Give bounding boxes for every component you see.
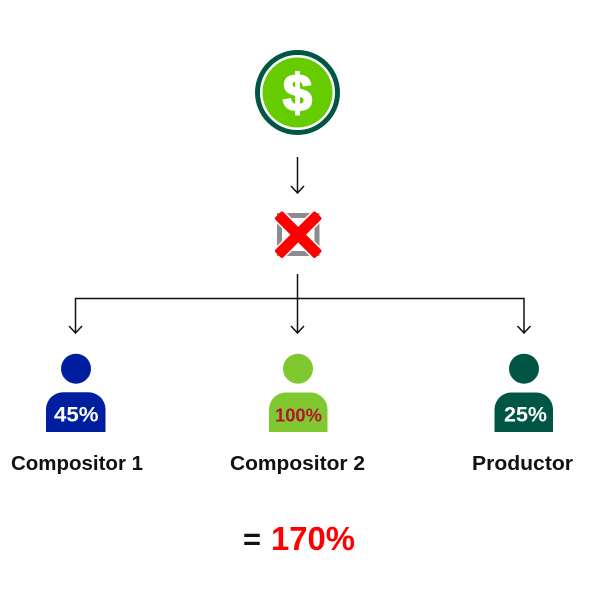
person: Productor — [494, 354, 553, 432]
share: 45%: 45% — [54, 404, 99, 426]
label: Compositor 2: Compositor 2 — [230, 453, 365, 475]
total: equals sign: = — [243, 523, 261, 556]
icon: crossed-out square — [258, 194, 339, 275]
person: Compositor 1 — [46, 354, 106, 432]
connector: branching arrows to three people — [69, 274, 530, 333]
share: 25%: 25% — [504, 404, 547, 426]
icon: dollar coin — [258, 52, 338, 132]
label: Compositor 1: Compositor 1 — [11, 453, 143, 475]
icon: dollar coin: $ — [283, 64, 312, 122]
total: 170%: 170% — [271, 520, 355, 557]
person: Compositor 2 — [269, 354, 328, 432]
arrow: coin to cross icon — [291, 157, 304, 193]
share: 100%: 100% — [275, 404, 322, 426]
label: Productor: Productor — [472, 453, 573, 475]
